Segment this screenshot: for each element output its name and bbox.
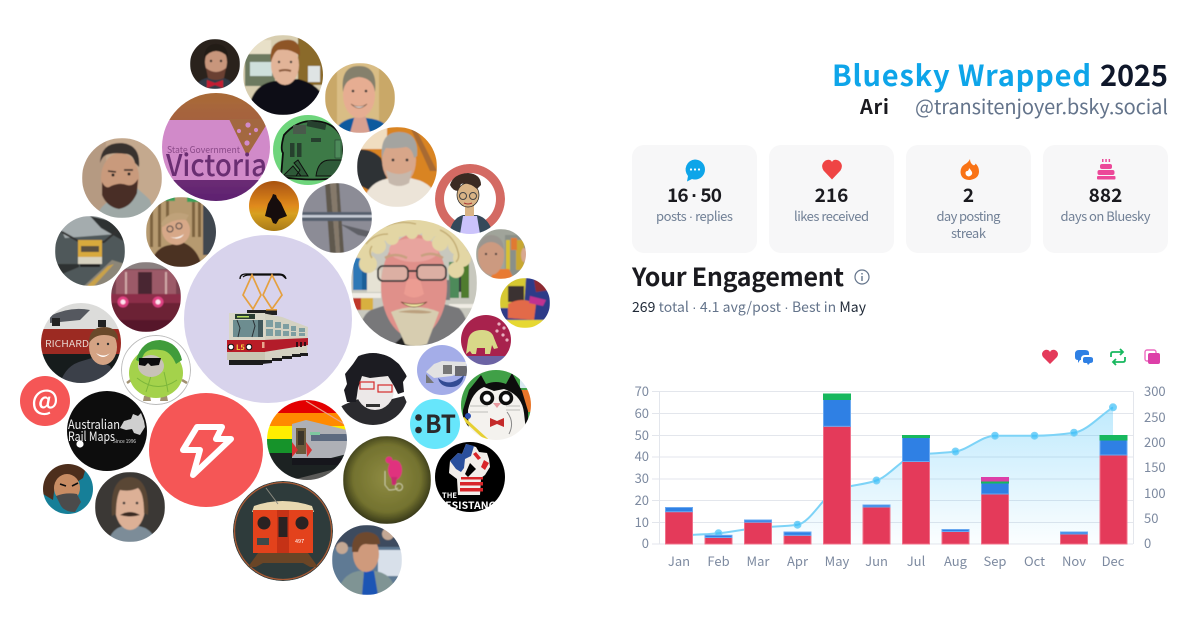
avatar: cartoon cat with bow tie (461, 370, 531, 440)
month labels: Aug (944, 551, 968, 570)
avatar bubble cloud (20, 35, 550, 595)
avatar: BT logo (410, 399, 460, 449)
avatar: BT logo: BT (425, 405, 456, 441)
icon: speech bubble (686, 160, 705, 182)
section heading: Your Engagement: Your Engagement (631, 258, 844, 294)
left axis labels: 30 (635, 468, 649, 487)
stat card: day posting streak: streak (951, 223, 987, 242)
left axis labels: 60 (635, 403, 649, 422)
month labels: Sep (983, 551, 1007, 570)
bar: Sep (982, 478, 1008, 544)
right axis labels: 150 (1144, 457, 1166, 476)
left axis labels: 70 (635, 381, 649, 400)
bar: Mar (744, 520, 772, 544)
handle: @transitenjoyer.bsky.social (915, 91, 1168, 120)
icon: likes legend (1042, 350, 1058, 364)
stat card: likes received: likes received (794, 206, 869, 225)
right axis labels: 300 (1144, 381, 1166, 400)
right axis labels: 50 (1144, 508, 1158, 527)
grid lines (652, 392, 1134, 544)
avatar: yellow train at station (55, 216, 125, 286)
bar: Apr (784, 532, 811, 544)
month labels: Apr (787, 551, 809, 570)
avatar: Australian Rail Maps logo: Rail Maps (68, 426, 115, 445)
avatar: Australian Rail Maps logo (67, 391, 147, 471)
month labels: Jun (865, 551, 888, 570)
month labels: Jan (668, 551, 690, 570)
avatar: The Resistance fist: RESISTANCE (438, 497, 502, 512)
tram front: L5 (236, 342, 245, 353)
month labels: Feb (707, 551, 730, 570)
combined engagement chart (635, 381, 1166, 570)
bar: May (824, 394, 850, 544)
avatar: tram track in pavement (302, 183, 372, 253)
avatar: pink figure on grass (343, 436, 431, 524)
title: Bluesky Wrapped (832, 53, 1091, 95)
stat card: likes received (769, 145, 894, 253)
left axis labels (635, 381, 649, 552)
avatar: red vintage tram badge: 497 (295, 537, 304, 545)
avatar: anime character with red glasses (341, 353, 407, 425)
icon: quotes legend (1145, 350, 1160, 364)
avatar: train on pride flag (267, 400, 347, 480)
right axis labels (1144, 381, 1166, 552)
bar: Feb (705, 535, 732, 544)
avatar: Australian Rail Maps logo: Since 1996 (113, 438, 136, 445)
month labels: Oct (1024, 551, 1045, 570)
avatar: sunset silhouette (249, 181, 299, 231)
month labels: May (825, 551, 850, 570)
icon: reposts legend (1111, 349, 1125, 365)
avatar: State Government Victoria logo: State Government (167, 143, 241, 156)
avatar: young man in green jacket (332, 525, 402, 595)
bar: Jul (902, 436, 930, 544)
right axis labels: 200 (1144, 432, 1166, 451)
stat card: days on Bluesky (1043, 145, 1168, 253)
stat card: day posting streak: day posting (936, 206, 1001, 225)
title: 2025 (1100, 53, 1168, 95)
avatar: @ mention badge: @ (31, 379, 59, 419)
right axis labels: 100 (1144, 483, 1166, 502)
month labels (668, 551, 1125, 570)
stat card: posts and replies: posts · replies (656, 206, 733, 225)
chart legend icons (1042, 349, 1160, 365)
avatar: bald man with glasses, hi-vis (476, 229, 527, 279)
left axis labels: 20 (635, 490, 649, 509)
icon: info (855, 270, 869, 284)
bar: Jun (863, 505, 890, 544)
left axis labels: 0 (642, 533, 649, 552)
engagement summary: 269 total · 4.1 avg/post · Best in May (632, 297, 867, 317)
stacked bars (666, 394, 1127, 544)
avatar: green locomotive (273, 115, 344, 185)
icon: heart (822, 160, 842, 180)
left axis labels: 40 (635, 446, 649, 465)
bar: Nov (1060, 532, 1088, 544)
tram front (227, 313, 265, 365)
avatar: elephant on magenta (461, 315, 511, 365)
month labels: Jul (907, 551, 926, 570)
avatar: man with moustache (95, 472, 165, 542)
avatar: blond curly-haired man with glasses (351, 213, 477, 346)
stat card: likes received: 216 (815, 181, 848, 208)
left axis labels: 10 (635, 512, 649, 531)
avatar: bearded man selfie (82, 138, 162, 218)
icon: birthday cake (1097, 159, 1116, 180)
avatar: man in front of RICHARD train: RICHARD (45, 336, 89, 350)
avatar: red tram headlights at night (111, 262, 181, 332)
right axis labels: 0 (1144, 533, 1151, 552)
avatar: grey-haired man in white shirt (357, 127, 439, 207)
avatar: State Government Victoria logo: Victoria (165, 141, 267, 185)
stat card: posts and replies (632, 145, 757, 253)
bar: Dec (1100, 436, 1127, 544)
avatar: cabbage creature with sunglasses (121, 335, 191, 405)
pantograph (240, 274, 286, 315)
stat card: day posting streak (906, 145, 1031, 253)
avatar: The Resistance fist (435, 442, 505, 512)
avatar: smiling man in cap and brown hoodie (146, 196, 217, 267)
cumulative line with area (676, 404, 1116, 544)
stat card: days on Bluesky: 882 (1089, 181, 1122, 208)
avatar: comic book collage (500, 278, 550, 328)
bar: Aug (942, 530, 969, 544)
stat card: days on Bluesky: days on Bluesky (1060, 206, 1151, 225)
stat card: day posting streak: 2 (963, 181, 974, 208)
stat card: posts and replies: 16 · 50 (667, 181, 722, 208)
month labels: Dec (1102, 551, 1125, 570)
avatar: @ mention badge (20, 376, 70, 426)
avatar: smiling older man in blue (325, 63, 395, 133)
display name: Ari (859, 91, 889, 120)
icon: replies legend (1075, 350, 1093, 365)
avatar: lightning bolt badge (149, 393, 263, 507)
avatar: man in front of RICHARD train (41, 303, 121, 383)
avatar: man with red bow tie (190, 39, 240, 89)
avatar: red vintage tram badge (233, 481, 333, 581)
right axis labels: 250 (1144, 407, 1166, 426)
month labels: Mar (747, 551, 770, 570)
bar: Jan (666, 508, 692, 544)
month labels: Nov (1062, 551, 1086, 570)
avatar: The Resistance fist: THE (442, 490, 457, 501)
avatar: cartoon person in red ring (435, 164, 505, 234)
avatar: aircraft on periwinkle (417, 345, 467, 395)
avatar: pixel-art tram on lavender, largest bubble (184, 235, 352, 403)
avatar: State Government Victoria logo (161, 92, 271, 202)
avatar: cartoon bearded man (43, 464, 93, 514)
left axis labels: 50 (635, 425, 649, 444)
avatar: Australian Rail Maps logo: Australian (68, 414, 120, 433)
tram side (262, 313, 308, 364)
icon: flame (960, 159, 979, 180)
avatar: man in black shirt (243, 35, 325, 115)
